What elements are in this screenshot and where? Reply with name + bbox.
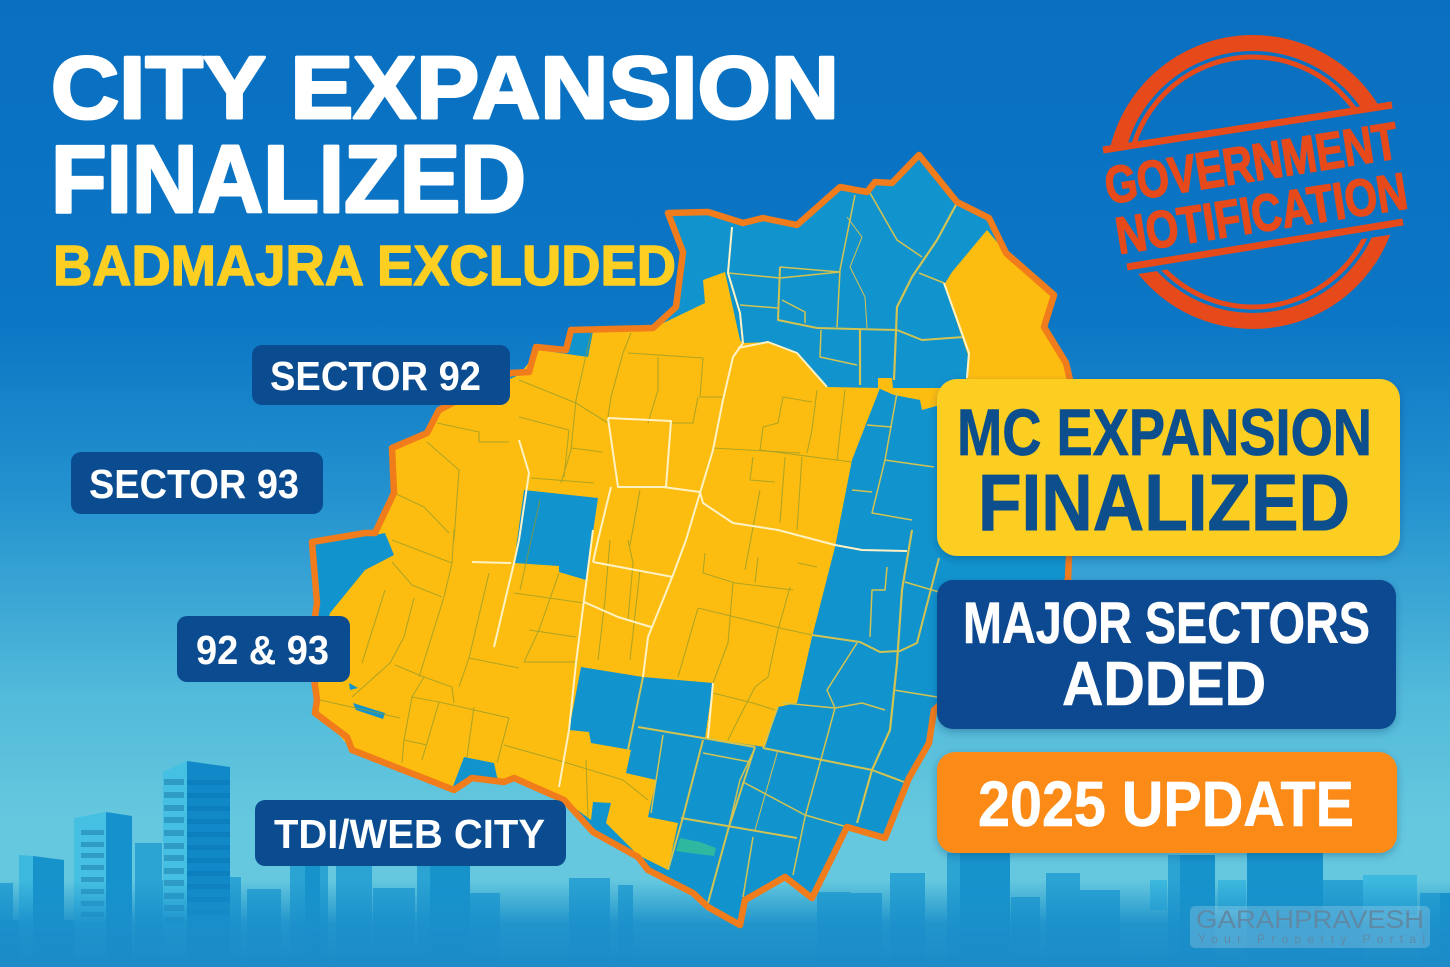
watermark: Your Property Portal bbox=[1198, 932, 1425, 946]
building: tall tower bbox=[163, 761, 230, 967]
label: 92 and 93 bbox=[177, 616, 350, 682]
map: thin lines in blue area bbox=[628, 193, 964, 903]
label: TDI / Web City: TDI/WEB CITY bbox=[274, 811, 545, 857]
watermark bbox=[1190, 906, 1430, 948]
map: yellow strip bbox=[878, 378, 940, 410]
title line 1: CITY EXPANSION bbox=[51, 38, 839, 137]
title bbox=[51, 38, 839, 298]
stamp outer ring bbox=[1103, 43, 1403, 321]
panel: MC expansion finalized: FINALIZED bbox=[978, 458, 1350, 547]
map of city expansion bbox=[310, 155, 1072, 925]
panel: major sectors added bbox=[937, 580, 1396, 729]
panel: major sectors added: ADDED bbox=[1062, 650, 1266, 719]
map: orange outline bbox=[310, 155, 1072, 925]
stamp: government notification bbox=[1101, 43, 1411, 321]
map: green patch bbox=[676, 838, 716, 856]
label: sector 93: SECTOR 93 bbox=[89, 461, 299, 507]
map: base blue area bbox=[310, 155, 1072, 925]
label: sector 92 bbox=[252, 345, 510, 405]
map: excluded blue block centre bbox=[514, 490, 598, 580]
building: mid tower bbox=[74, 812, 132, 967]
map: eastern yellow area bbox=[944, 230, 1070, 380]
title line 2: FINALIZED bbox=[51, 126, 526, 233]
map: white main roads bbox=[472, 227, 969, 787]
map: thin lines in yellow area bbox=[320, 333, 852, 817]
stamp text bbox=[1101, 112, 1411, 266]
panel: MC expansion finalized: MC EXPANSION bbox=[957, 395, 1372, 469]
map: included yellow area bbox=[315, 272, 880, 870]
watermark: GARAHPRAVESH bbox=[1196, 906, 1424, 934]
panel: 2025 update: 2025 UPDATE bbox=[978, 768, 1354, 840]
label: TDI / Web City bbox=[255, 800, 566, 866]
label: sector 93 bbox=[71, 452, 323, 514]
subtitle: BADMAJRA EXCLUDED bbox=[53, 234, 676, 298]
label: 92 and 93: 92 & 93 bbox=[196, 627, 329, 673]
panel: MC expansion finalized bbox=[937, 379, 1400, 556]
panel: 2025 update bbox=[937, 752, 1397, 853]
map: small blue pockets bbox=[349, 683, 385, 719]
city skyline bbox=[0, 761, 1450, 967]
label: sector 92: SECTOR 92 bbox=[270, 353, 481, 399]
